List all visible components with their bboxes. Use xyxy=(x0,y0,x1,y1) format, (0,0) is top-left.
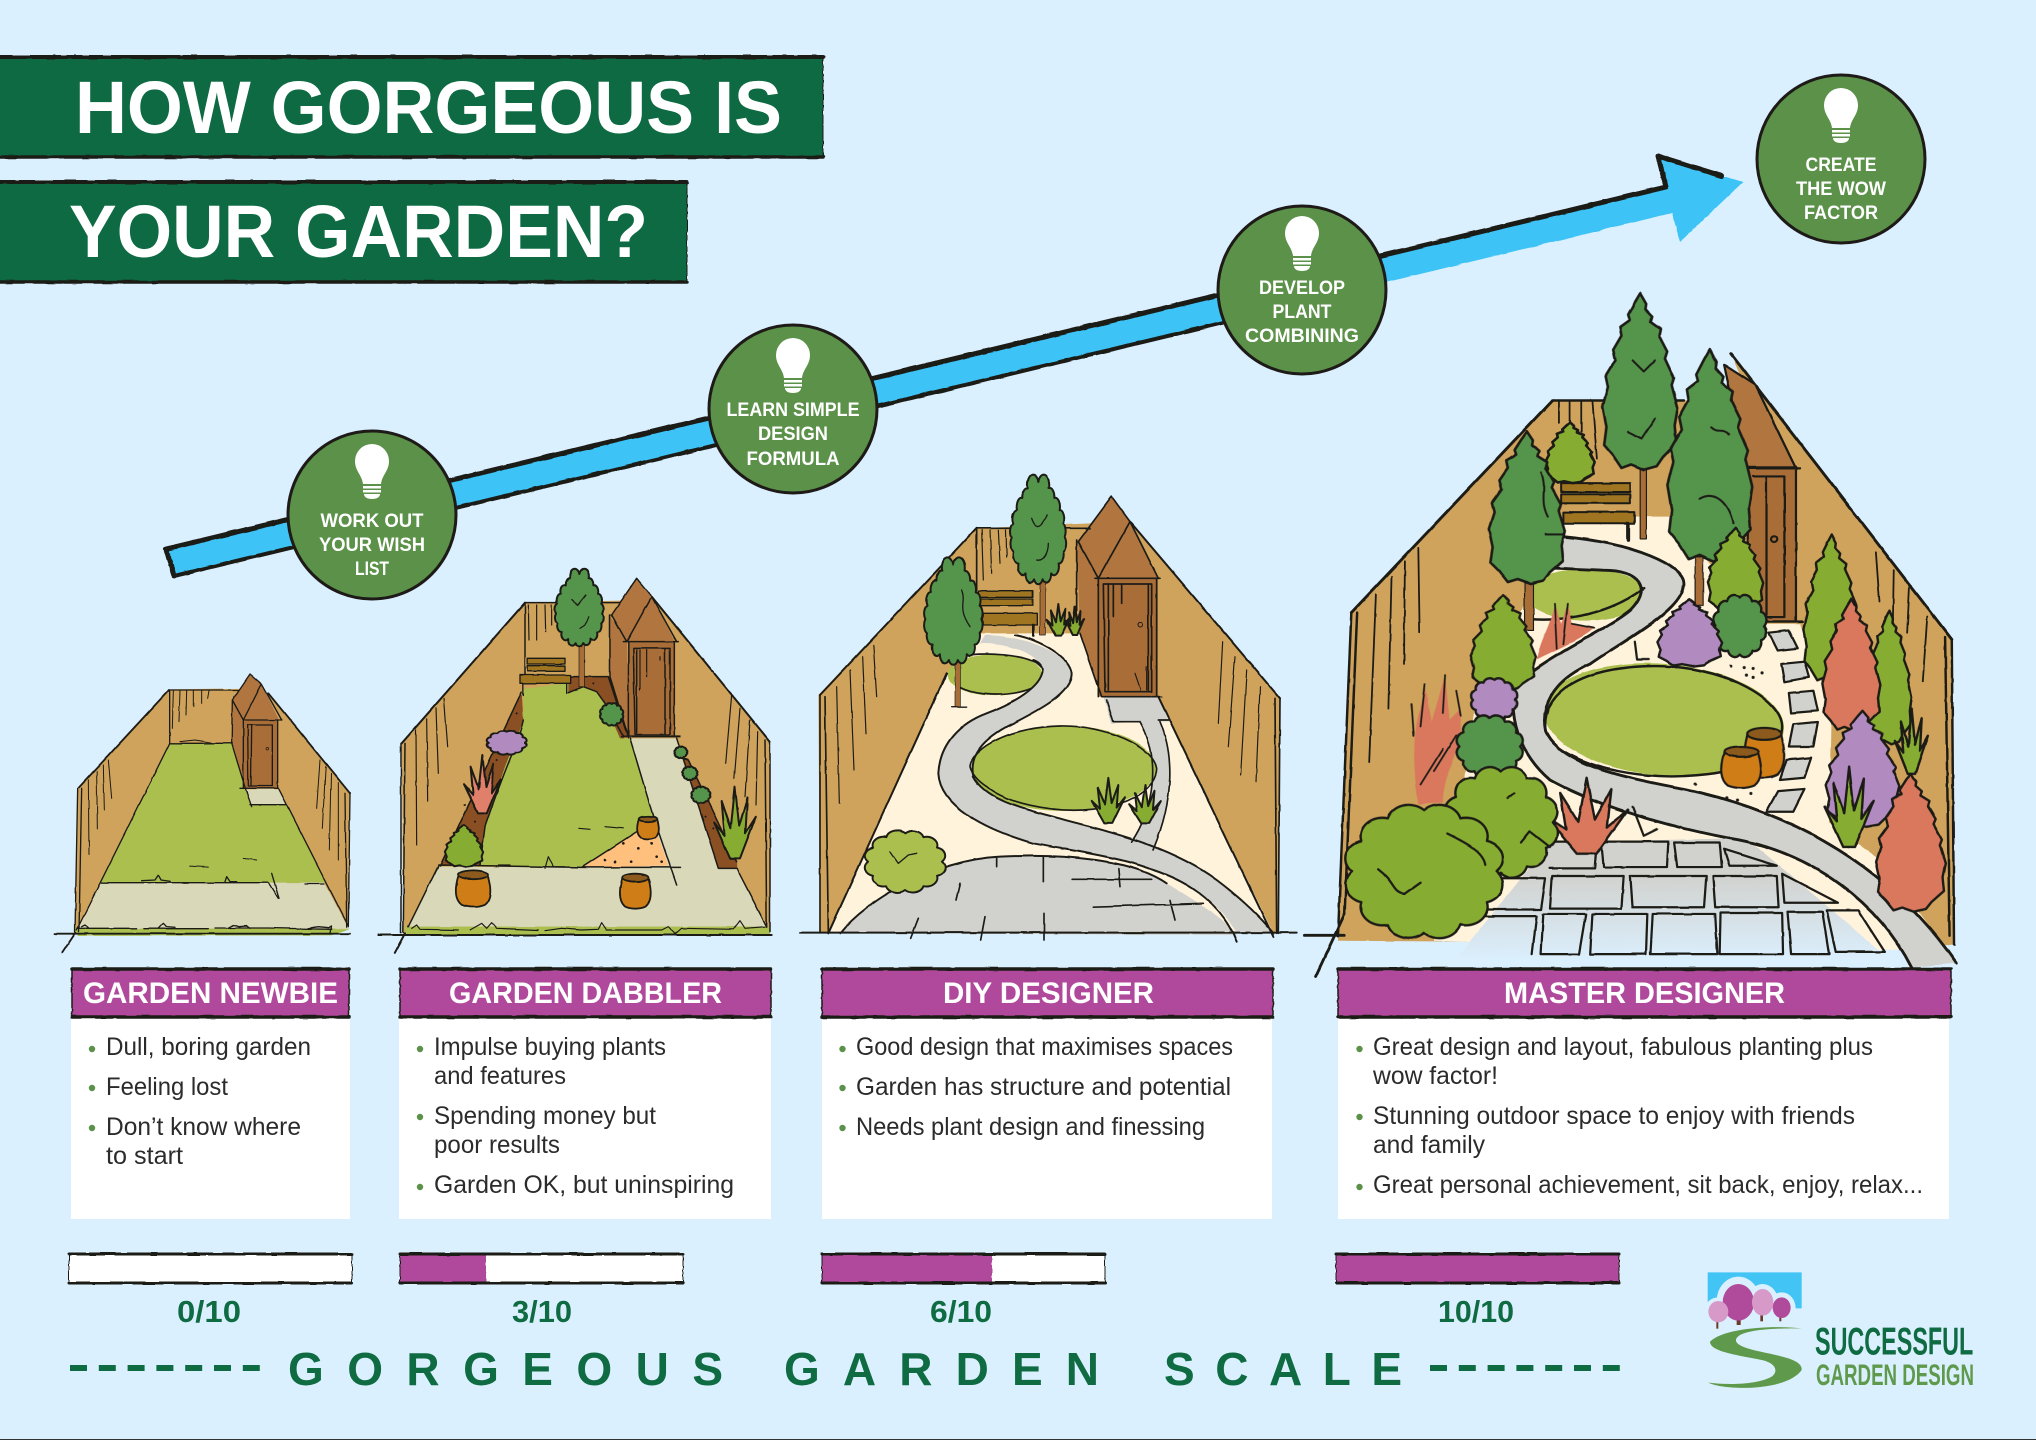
salmon grasses on lawn edge xyxy=(1537,604,1595,659)
step circle: create the wow factor: THE WOW xyxy=(1796,179,1886,200)
shrubs and planting xyxy=(445,703,756,867)
trees xyxy=(924,475,1066,707)
title bar: line two: YOUR GARDEN? xyxy=(69,190,648,273)
panel: garden newbie xyxy=(71,969,350,1219)
paving area xyxy=(840,856,1237,935)
bullet list: poor results xyxy=(434,1131,560,1159)
step circle: work out your wish list xyxy=(288,431,456,599)
illustration: garden dabbler xyxy=(378,569,772,953)
right-hand planting xyxy=(1803,534,1945,912)
bullet list: and family xyxy=(1373,1131,1485,1159)
bullet list: Great personal achievement, sit back, enjoy, relax... xyxy=(1373,1171,1923,1199)
shrub and grasses xyxy=(865,604,1161,892)
bench xyxy=(978,591,1037,636)
bullet list xyxy=(89,1033,311,1170)
bench xyxy=(520,658,571,695)
shed fills xyxy=(1077,497,1158,697)
heading xyxy=(72,969,349,1017)
illustration: master designer xyxy=(1304,293,1956,976)
lawns xyxy=(1525,569,1646,621)
bullet list xyxy=(417,1033,734,1199)
panel: garden dabbler xyxy=(399,969,771,1219)
heading xyxy=(1338,969,1951,1017)
bullet list: Stunning outdoor space to enjoy with friends xyxy=(1373,1102,1855,1130)
pots xyxy=(456,816,659,909)
icon: light bulb xyxy=(776,338,810,393)
title bar: line one: HOW GORGEOUS IS xyxy=(75,66,782,149)
score bar: 10/10 xyxy=(1336,1254,1619,1329)
step circle: develop plant combining: DEVELOP xyxy=(1259,278,1345,299)
heading: GARDEN NEWBIE xyxy=(83,977,338,1010)
title xyxy=(0,57,823,282)
bullet list: Garden has structure and potential xyxy=(856,1073,1231,1101)
logo: successful garden design xyxy=(1703,1272,1974,1392)
winding path xyxy=(1513,537,1956,968)
paving stones xyxy=(1456,838,1889,959)
step circle: learn simple design formula: FORMULA xyxy=(746,449,840,470)
heading: GARDEN DABBLER xyxy=(449,977,722,1010)
step circle: work out your wish list: YOUR WISH xyxy=(319,535,425,556)
bullet list: to start xyxy=(106,1142,183,1170)
winding path xyxy=(938,635,1273,933)
stepping stones xyxy=(1767,630,1818,811)
icon: light bulb xyxy=(355,444,389,499)
shed xyxy=(1724,365,1802,622)
bullet list: and features xyxy=(434,1062,566,1090)
step circle: work out your wish list: LIST xyxy=(355,559,389,580)
bullet list: wow factor! xyxy=(1372,1062,1498,1090)
heading: DIY DESIGNER xyxy=(943,977,1154,1010)
bullet list: Spending money but xyxy=(434,1102,656,1130)
scale caption xyxy=(70,1343,1620,1395)
lawns xyxy=(971,726,1156,811)
score bar: 3/10 xyxy=(400,1254,683,1329)
panel: diy designer xyxy=(822,969,1273,1219)
illustration: diy designer xyxy=(800,475,1297,942)
bullet list: Good design that maximises spaces xyxy=(856,1033,1233,1061)
bullet list: Great design and layout, fabulous planting plus xyxy=(1373,1033,1873,1061)
bullet list: Needs plant design and finessing xyxy=(856,1113,1205,1141)
step circle: learn simple design formula: DESIGN xyxy=(758,424,828,445)
bullet list: Dull, boring garden xyxy=(106,1033,311,1061)
bullet list xyxy=(839,1033,1233,1141)
bullet list: Feeling lost xyxy=(106,1073,228,1101)
icon: light bulb xyxy=(1824,88,1858,143)
icon: light bulb xyxy=(1285,216,1319,271)
score bar: 6/10 xyxy=(822,1254,1105,1329)
heading xyxy=(400,969,771,1017)
central planting xyxy=(1657,528,1766,666)
score bar: 6/10: 6/10 xyxy=(930,1294,992,1329)
scale caption: GARDEN xyxy=(784,1343,1099,1395)
step circle: develop plant combining: COMBINING xyxy=(1245,326,1359,347)
step circle: develop plant combining xyxy=(1218,206,1386,374)
side path xyxy=(1103,697,1170,848)
step circle: create the wow factor: FACTOR xyxy=(1804,203,1878,224)
score bar: 3/10: 3/10 xyxy=(512,1294,572,1329)
pots xyxy=(1721,728,1784,788)
step circle: create the wow factor xyxy=(1757,75,1925,243)
step circle: work out your wish list: WORK OUT xyxy=(320,511,424,532)
step circle: create the wow factor: CREATE xyxy=(1806,155,1876,176)
heading: MASTER DESIGNER xyxy=(1504,977,1785,1010)
left-hand planting xyxy=(1414,675,1461,805)
step circle: learn simple design formula xyxy=(709,325,877,493)
logo mark xyxy=(1703,1272,1804,1388)
scale caption: SCALE xyxy=(1164,1343,1402,1395)
heading xyxy=(822,969,1273,1017)
score bar: 0/10 xyxy=(69,1254,352,1329)
bullet list xyxy=(1356,1033,1923,1199)
step circle: develop plant combining: PLANT xyxy=(1272,302,1332,323)
bullet list: Don’t know where xyxy=(106,1113,301,1141)
score bar: 0/10: 0/10 xyxy=(177,1294,241,1329)
tree xyxy=(555,569,604,687)
score bar: 10/10: 10/10 xyxy=(1438,1294,1514,1329)
bench xyxy=(1561,483,1635,540)
bullet list: Impulse buying plants xyxy=(434,1033,666,1061)
step circle: learn simple design formula: LEARN SIMPLE xyxy=(726,400,860,421)
scale caption: GORGEOUS xyxy=(288,1343,723,1395)
bullet list: Garden OK, but uninspiring xyxy=(434,1171,734,1199)
trees and conifers xyxy=(1489,293,1752,630)
panel: master designer xyxy=(1338,969,1951,1219)
arrow: rising progress arrow xyxy=(166,156,1743,576)
illustration: garden newbie xyxy=(55,674,350,953)
